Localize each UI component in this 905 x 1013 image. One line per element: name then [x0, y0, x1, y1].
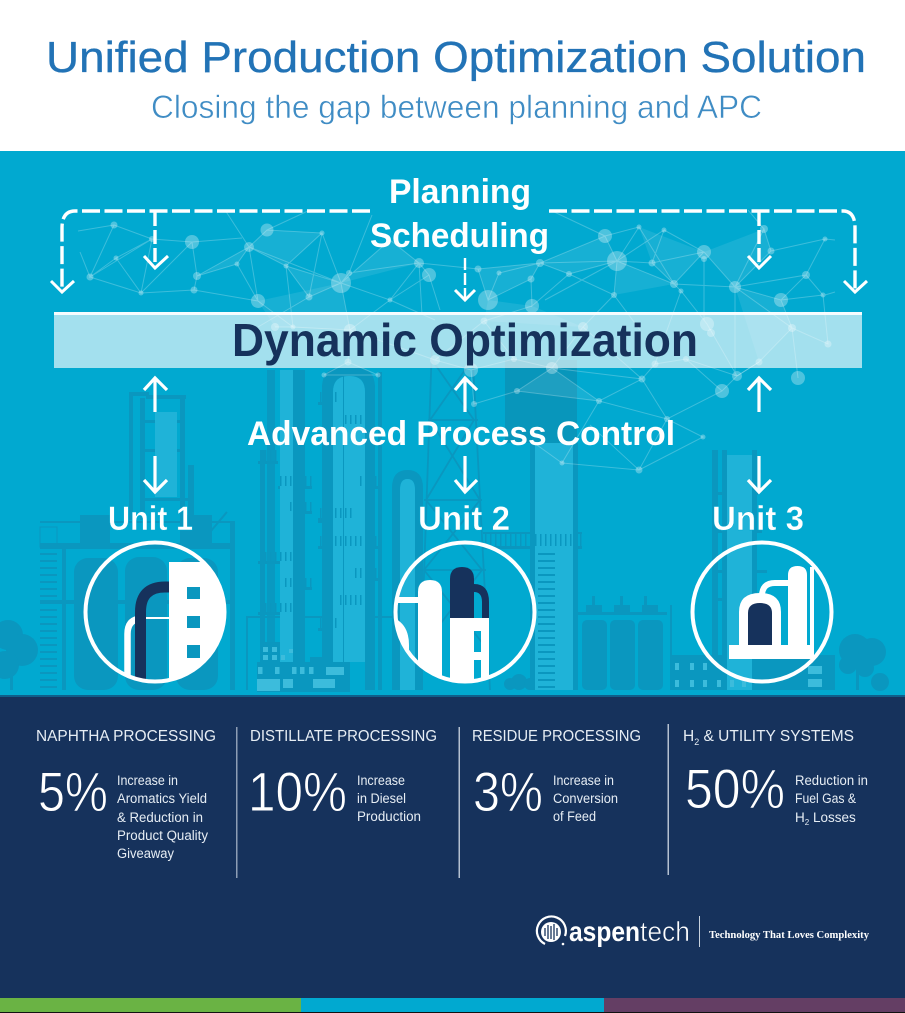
- colour strip: [0, 998, 905, 1013]
- panel: results footer: [0, 695, 905, 999]
- dashed arrows from planning: [51, 211, 867, 300]
- column: H2 and utility systems: UTILITY SYSTEMS: [718, 728, 854, 745]
- column: H2 and utility systems: Reduction in: [795, 773, 868, 788]
- footer background: [0, 695, 905, 999]
- column: naphtha processing: NAPHTHA PROCESSING: [36, 728, 216, 745]
- unit 3 label: Unit 3: [712, 500, 804, 538]
- column: naphtha processing: Increase in: [117, 773, 178, 788]
- column: residue processing: RESIDUE PROCESSING: [472, 728, 641, 745]
- low buildings: [257, 662, 350, 692]
- column: distillate processing: DISTILLATE PROCESSING: [250, 728, 437, 745]
- aspentech logo: Technology That Loves Complexity: [709, 929, 869, 941]
- column: H2 and utility systems: Fuel Gas &: [795, 791, 856, 806]
- central columns: [260, 450, 265, 690]
- arrows between optimization and units: [144, 378, 771, 492]
- dynamic optimization bar: [54, 312, 862, 368]
- column: residue processing: of Feed: [553, 809, 596, 824]
- left unit structure: [40, 543, 235, 549]
- column: H2 and utility systems: 2: [694, 737, 699, 747]
- building windows: [257, 647, 822, 691]
- column: H2 and utility systems: &: [699, 728, 718, 745]
- unit 2 label: Unit 2: [418, 500, 510, 538]
- column: distillate processing: [248, 728, 437, 824]
- column: distillate processing: 10%: [248, 760, 347, 823]
- stairs and railings: [258, 392, 582, 690]
- network graphic: [78, 210, 835, 474]
- column: naphtha processing: & Reduction in: [117, 810, 203, 825]
- refinery silhouette: [0, 345, 889, 692]
- planning label: Planning: [389, 173, 531, 211]
- column: residue processing: Conversion: [553, 791, 618, 806]
- icon: unit 2: [394, 542, 534, 690]
- column: H2 and utility systems: Losses: [809, 810, 856, 825]
- column: H2 and utility systems: 2: [805, 818, 810, 827]
- dynamic optimization label: Dynamic Optimization: [232, 314, 698, 366]
- panel: process diagram: [0, 151, 905, 695]
- lattice tower: [420, 345, 490, 690]
- panel background: [0, 151, 905, 695]
- scheduling label: Scheduling: [370, 217, 549, 255]
- column: distillate processing: Production: [357, 809, 421, 824]
- right tower: [712, 450, 718, 690]
- icon: unit 1: [86, 542, 239, 685]
- unit 1 label: Unit 1: [108, 500, 193, 538]
- aspentech logo: [537, 916, 869, 947]
- column: distillate processing: in Diesel: [357, 791, 406, 806]
- column: residue processing: Increase in: [553, 773, 614, 788]
- icon: logo mark: [537, 916, 566, 945]
- column: naphtha processing: Product Quality: [117, 828, 208, 843]
- icon: unit 3: [692, 542, 832, 682]
- column: naphtha processing: 5%: [38, 760, 108, 823]
- trees: [0, 620, 23, 650]
- column: H2 and utility systems: H: [795, 810, 805, 825]
- column: distillate processing: Increase: [357, 773, 405, 788]
- storage tanks: [582, 620, 607, 690]
- column: residue processing: [472, 728, 641, 824]
- column: H2 and utility systems: [683, 728, 868, 827]
- title: Unified Production Optimization Solution: [46, 33, 866, 82]
- aspentech logo: aspen: [569, 916, 640, 947]
- column: naphtha processing: Giveaway: [117, 846, 174, 861]
- subtitle: Closing the gap between planning and APC: [151, 89, 762, 125]
- chimney: [505, 360, 577, 443]
- aspentech logo: tech: [640, 916, 690, 947]
- column: H2 and utility systems: H: [683, 728, 694, 745]
- column: naphtha processing: [36, 728, 216, 861]
- advanced process control label: Advanced Process Control: [247, 415, 675, 453]
- column: residue processing: 3%: [473, 760, 543, 823]
- column: H2 and utility systems: 50%: [685, 757, 785, 820]
- lighter column fills: [155, 370, 752, 690]
- column: naphtha processing: Aromatics Yield: [117, 791, 207, 806]
